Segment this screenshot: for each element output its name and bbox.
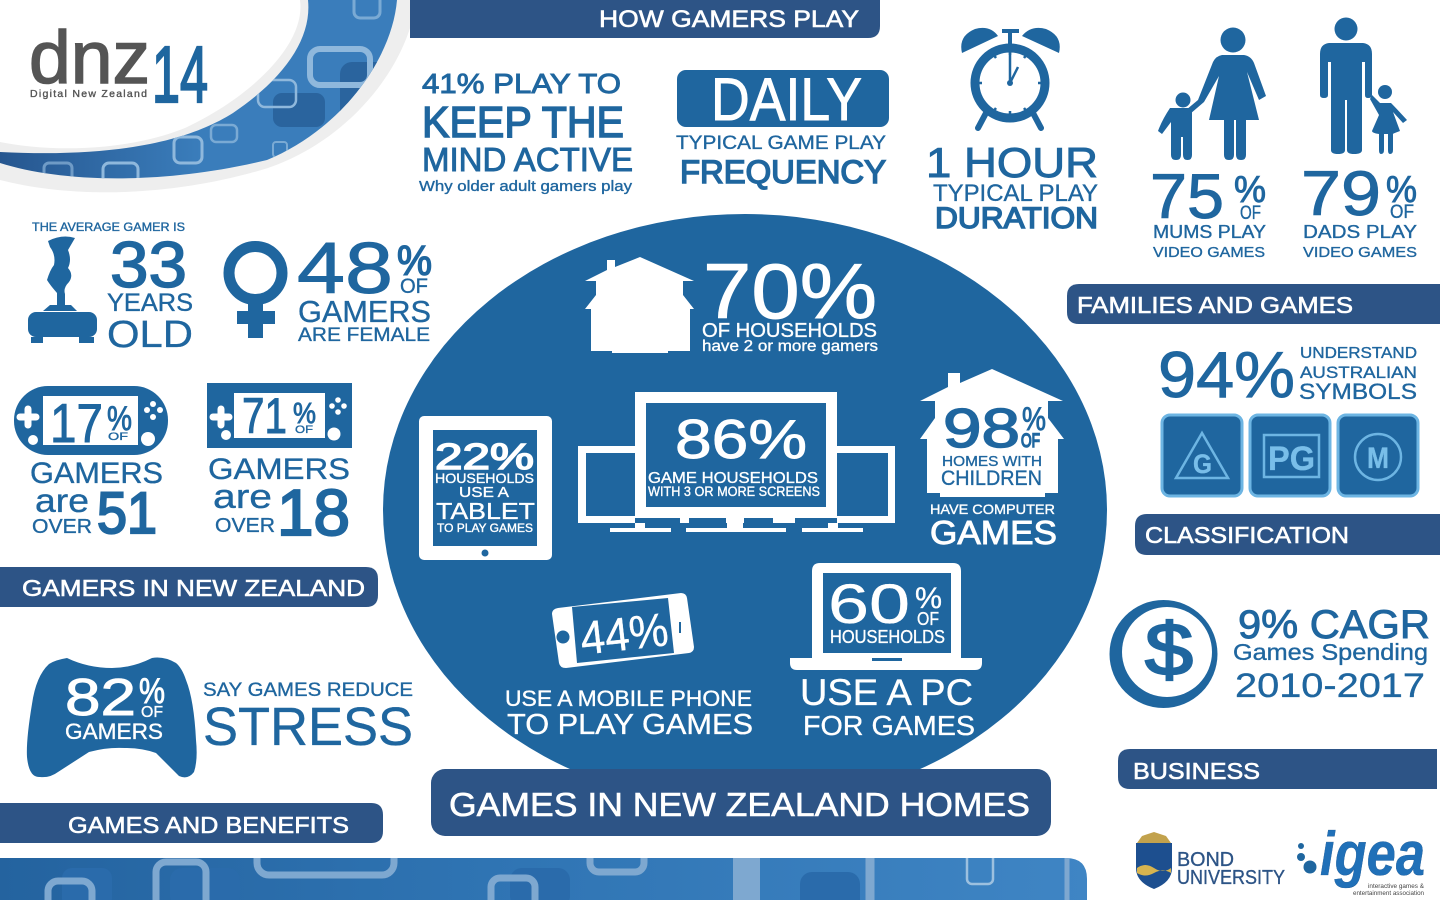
stat: 48% female: GAMERS	[298, 294, 431, 329]
icon: three screens with 86%	[578, 392, 895, 532]
panel: central circle, games in homes	[383, 214, 1107, 806]
icon: game controller with 82%: %	[139, 672, 165, 711]
icon: tablet with 22%: TABLET	[436, 498, 535, 524]
icon: joystick	[28, 237, 97, 343]
icon: handheld console with 71%: %	[293, 398, 316, 430]
icon: mobile phone with 44%	[552, 593, 694, 668]
stat: keep the mind active: MIND ACTIVE	[422, 141, 633, 178]
icon: handheld console with 71%	[207, 383, 352, 448]
icon: dad and child	[1320, 18, 1407, 154]
stat: 70% households: 70%	[703, 247, 877, 335]
logo: dnz14: Digital New Zealand	[30, 88, 147, 100]
stat: gamers over 51: OVER	[32, 516, 92, 538]
stat: 1 hour duration	[926, 139, 1098, 235]
icon: house with 98%	[920, 369, 1064, 497]
stat: average age 33	[28, 220, 193, 356]
stat: daily frequency: TYPICAL GAME PLAY	[676, 133, 886, 154]
stat: 79% dads play: OF	[1390, 202, 1414, 223]
heading band: classification	[1135, 514, 1440, 555]
stat: 94% understand symbols: UNDERSTAND	[1300, 345, 1417, 362]
stat: 1 hour duration: 1 HOUR	[926, 139, 1098, 186]
stat: 75% mums play: 75	[1150, 162, 1224, 232]
icon: handheld console with 71%: OF	[295, 424, 313, 436]
stat: average age 33: OLD	[107, 314, 193, 356]
icon: handheld console with 17%	[14, 386, 168, 455]
icon: three screens with 86%: 86%	[675, 408, 807, 470]
stat: gamers over 18: OVER	[215, 515, 275, 537]
stat: keep the mind active	[419, 68, 633, 195]
stat: gamers over 51: GAMERS	[30, 457, 163, 490]
logo: igea	[1297, 820, 1425, 897]
icon: tablet with 22%: TO PLAY GAMES	[437, 523, 533, 535]
logo: Bond University	[1136, 832, 1285, 889]
stat: 48% female: 48	[297, 229, 393, 309]
heading band: gamers in new zealand	[0, 567, 378, 607]
icon: laptop with 60%: 60	[828, 572, 910, 635]
stat: 70% households: OF HOUSEHOLDS	[702, 320, 877, 342]
heading band: games and benefits: GAMES AND BENEFITS	[68, 812, 349, 838]
stat: 94% understand symbols: 94%	[1158, 338, 1295, 411]
stat: daily frequency: DAILY	[711, 66, 862, 133]
logo: dnz14: dnz	[29, 16, 150, 99]
icon: dollar coin	[1110, 600, 1218, 708]
stat: 9% CAGR: Games Spending	[1233, 639, 1428, 665]
stat: 79% dads play: VIDEO GAMES	[1303, 244, 1417, 261]
icon: game controller with 82%: GAMERS	[65, 719, 163, 744]
icon: alarm clock	[961, 28, 1060, 128]
icon: tablet with 22%: HOUSEHOLDS	[435, 471, 534, 486]
icon: tablet with 22%: USE A	[459, 484, 509, 501]
heading band: games and benefits	[0, 803, 383, 843]
icon: M classification	[1338, 415, 1418, 496]
stat: 75% mums play: OF	[1240, 203, 1261, 224]
stat: daily frequency: FREQUENCY	[680, 154, 886, 190]
stat: 48% female: OF	[400, 275, 428, 298]
text: use a PC: USE A PC	[800, 672, 973, 713]
stat: 48% female: %	[397, 237, 432, 284]
icon: laptop with 60%: %	[915, 582, 942, 615]
stat: 75% mums play: %	[1234, 169, 1266, 210]
text: use a PC	[800, 672, 975, 741]
heading band: families and games: FAMILIES AND GAMES	[1077, 292, 1353, 318]
icon: handheld console with 17%: OF	[108, 431, 128, 443]
stat: 9% CAGR: 9% CAGR	[1238, 603, 1430, 647]
icon: tablet with 22%: 22%	[435, 436, 534, 477]
stat: 79% dads play	[1301, 159, 1417, 261]
text: mobile phone stat: TO PLAY GAMES	[507, 709, 753, 741]
heading band: gamers in new zealand: GAMERS IN NEW ZEALAND	[22, 575, 365, 601]
icon: tablet with 22%	[419, 416, 552, 560]
icon: house with 98%: %	[1022, 401, 1046, 437]
icon: game controller with 82%: 82	[65, 669, 136, 727]
logo: dnz14: 14	[152, 30, 208, 119]
heading band: families and games	[1067, 284, 1440, 324]
stat: keep the mind active: 41% PLAY TO	[422, 68, 621, 99]
stat: 9% CAGR	[1233, 603, 1430, 705]
icon: mobile phone with 44%: 44%	[577, 602, 671, 665]
icon: house with 98%: OF	[1021, 431, 1040, 452]
stat: keep the mind active: KEEP THE	[422, 98, 624, 147]
icon: house	[585, 257, 694, 353]
heading band: business: BUSINESS	[1133, 758, 1260, 784]
stat: 94% understand symbols: AUSTRALIAN	[1300, 363, 1417, 382]
icon: house with 98%: HOMES WITH	[942, 453, 1042, 470]
icon: PG classification	[1250, 415, 1330, 496]
icon: handheld console with 17%: 17	[50, 392, 103, 454]
bottom decorative band	[0, 858, 1087, 900]
logo: Bond University: UNIVERSITY	[1177, 867, 1285, 889]
stat: average age 33: 33	[110, 228, 187, 301]
logo: dnz14	[29, 16, 208, 119]
icon: game controller with 82%	[27, 658, 197, 777]
icon: female symbol	[229, 246, 282, 338]
icon: PG classification: PG	[1268, 440, 1315, 478]
stat: reduce stress: SAY GAMES REDUCE	[203, 680, 413, 701]
heading band: games in new zealand homes: GAMES IN NEW ZEALAND HOMES	[449, 786, 1030, 823]
icon: house with 98%: CHILDREN	[941, 467, 1042, 490]
stat: gamers over 18: 18	[277, 476, 350, 549]
stat: keep the mind active: Why older adult gamers play	[419, 179, 633, 195]
icon: dollar coin: $	[1145, 608, 1193, 691]
stat: average age 33: THE AVERAGE GAMER IS	[32, 220, 185, 234]
text: mobile phone stat: USE A MOBILE PHONE	[505, 686, 752, 711]
stat: 70% households: have 2 or more gamers	[702, 338, 878, 355]
icon: handheld console with 71%: 71	[242, 388, 287, 444]
stat: gamers over 18	[208, 453, 350, 549]
heading band: games in new zealand homes	[431, 769, 1051, 836]
stat: 94% understand symbols	[1158, 338, 1417, 411]
text: mobile phone stat	[505, 686, 753, 741]
stat: 94% understand symbols: SYMBOLS	[1299, 379, 1417, 404]
icon: handheld console with 17%: %	[107, 400, 132, 438]
icon: three screens with 86%: WITH 3 OR MORE SCREENS	[648, 484, 820, 499]
logo: igea: entertainment association	[1353, 891, 1424, 897]
stat: gamers over 51	[30, 457, 163, 546]
stat: 79% dads play: %	[1386, 169, 1417, 210]
stat: 75% mums play: VIDEO GAMES	[1153, 244, 1265, 261]
stat: reduce stress: STRESS	[203, 697, 413, 757]
icon: M classification: M	[1367, 442, 1389, 475]
icon: laptop with 60%	[790, 563, 982, 670]
text: have computer games: GAMES	[930, 514, 1057, 551]
stat: 79% dads play: 79	[1301, 159, 1381, 229]
logo: igea: igea	[1320, 820, 1425, 889]
stat: gamers over 51: 51	[97, 481, 157, 546]
icon: mum and child	[1158, 28, 1266, 160]
stat: 1 hour duration: DURATION	[935, 202, 1098, 235]
heading band: how gamers play	[410, 0, 880, 38]
stat: 1 hour duration: TYPICAL PLAY	[933, 180, 1098, 207]
stat: 9% CAGR: 2010-2017	[1235, 667, 1425, 705]
text: have computer games	[930, 501, 1057, 551]
stat: gamers over 18: GAMERS	[208, 453, 350, 486]
text: use a PC: FOR GAMES	[803, 710, 975, 741]
logo: Bond University: BOND	[1177, 849, 1234, 871]
icon: laptop with 60%: HOUSEHOLDS	[830, 627, 945, 647]
stat: 75% mums play: MUMS PLAY	[1153, 222, 1266, 242]
heading band: classification: CLASSIFICATION	[1145, 522, 1349, 548]
icon: three screens with 86%: GAME HOUSEHOLDS	[648, 470, 818, 487]
stat: 48% female: ARE FEMALE	[298, 325, 430, 346]
stat: 75% mums play	[1150, 162, 1266, 261]
stat: gamers over 51: are	[35, 482, 89, 519]
heading band: business	[1118, 749, 1437, 789]
icon: G classification: G	[1193, 449, 1212, 479]
stat: average age 33: YEARS	[107, 289, 193, 317]
stat: gamers over 18: are	[213, 478, 272, 516]
logo: igea: interactive games &	[1368, 884, 1424, 890]
icon: house with 98%: 98	[943, 397, 1020, 459]
stat: 79% dads play: DADS PLAY	[1303, 222, 1417, 242]
heading band: how gamers play: HOW GAMERS PLAY	[599, 6, 859, 33]
icon: G classification	[1162, 415, 1242, 496]
text: have computer games: HAVE COMPUTER	[930, 501, 1055, 517]
stat: 48% female	[297, 229, 432, 346]
stat: daily frequency	[676, 66, 889, 190]
top-left swoosh	[0, 0, 416, 192]
icon: game controller with 82%: OF	[141, 704, 163, 721]
icon: laptop with 60%: OF	[917, 609, 939, 629]
